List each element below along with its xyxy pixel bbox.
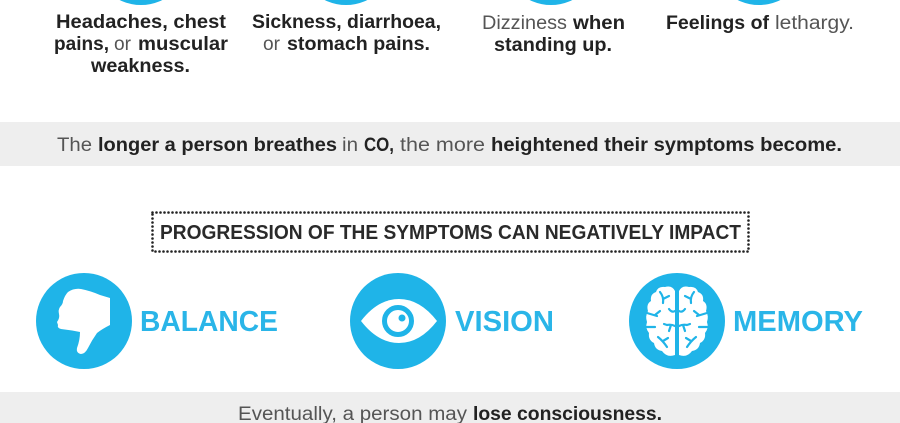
text: headaches, chest pains, muscular weakness: Headaches, chest xyxy=(56,12,227,33)
icon: brain xyxy=(629,273,725,369)
impact item: memory xyxy=(629,273,863,369)
callout band: longer exposure: in xyxy=(342,135,358,156)
callout band: longer exposure xyxy=(0,122,900,166)
text: feelings of lethargy xyxy=(666,13,854,34)
text: sickness, diarrhoea, stomach pains xyxy=(252,12,441,55)
icon: thumbs down xyxy=(36,273,132,369)
text: dizziness when standing up: Dizziness xyxy=(482,13,567,34)
label: balance: BALANCE xyxy=(140,306,278,338)
text: feelings of lethargy: Feelings of xyxy=(666,13,770,34)
callout band: longer exposure: heightened their symptoms become. xyxy=(491,135,842,156)
heading: progression of the symptoms, dotted box xyxy=(152,212,748,252)
icon circle: sickness (cropped) xyxy=(298,0,394,5)
text: dizziness when standing up: standing up. xyxy=(494,35,612,56)
text: dizziness when standing up: when xyxy=(572,13,625,34)
text: headaches, chest pains, muscular weakness xyxy=(54,12,229,77)
symptom column: lethargy xyxy=(666,0,854,34)
text: sickness, diarrhoea, stomach pains: stomach pains. xyxy=(287,34,430,55)
callout band: longer exposure: longer a person breathes xyxy=(98,135,337,156)
callout band: longer exposure: the more xyxy=(400,135,485,156)
icon circle: headaches (cropped) xyxy=(93,0,189,5)
impact item: vision xyxy=(350,273,554,369)
icon: eye xyxy=(350,273,446,369)
callout band: longer exposure: CO, xyxy=(364,135,394,156)
label: vision: VISION xyxy=(455,306,554,338)
symptom column: dizziness xyxy=(482,0,625,56)
label: memory: MEMORY xyxy=(733,306,863,338)
heading: progression of the symptoms, dotted box: PROGRESSION OF THE SYMPTOMS CAN NEGATIVELY IMPACT xyxy=(160,222,741,244)
text: feelings of lethargy: lethargy. xyxy=(775,13,854,34)
text: headaches, chest pains, muscular weakness: or xyxy=(114,34,132,55)
icon circle: dizziness (cropped) xyxy=(503,0,599,5)
text: headaches, chest pains, muscular weakness: weakness. xyxy=(90,56,190,77)
impact item: balance xyxy=(36,273,278,369)
text: dizziness when standing up xyxy=(482,13,625,56)
text: headaches, chest pains, muscular weakness: pains, xyxy=(54,34,109,55)
text: headaches, chest pains, muscular weakness: muscular xyxy=(138,34,229,55)
icon circle: lethargy (cropped) xyxy=(711,0,807,5)
symptom column: sickness xyxy=(252,0,441,55)
callout band: loss of consciousness xyxy=(0,392,900,423)
symptom column: headaches xyxy=(54,0,229,77)
text: sickness, diarrhoea, stomach pains: Sickness, diarrhoea, xyxy=(252,12,441,33)
callout band: longer exposure: The xyxy=(57,135,92,156)
text: sickness, diarrhoea, stomach pains: or xyxy=(263,34,281,55)
